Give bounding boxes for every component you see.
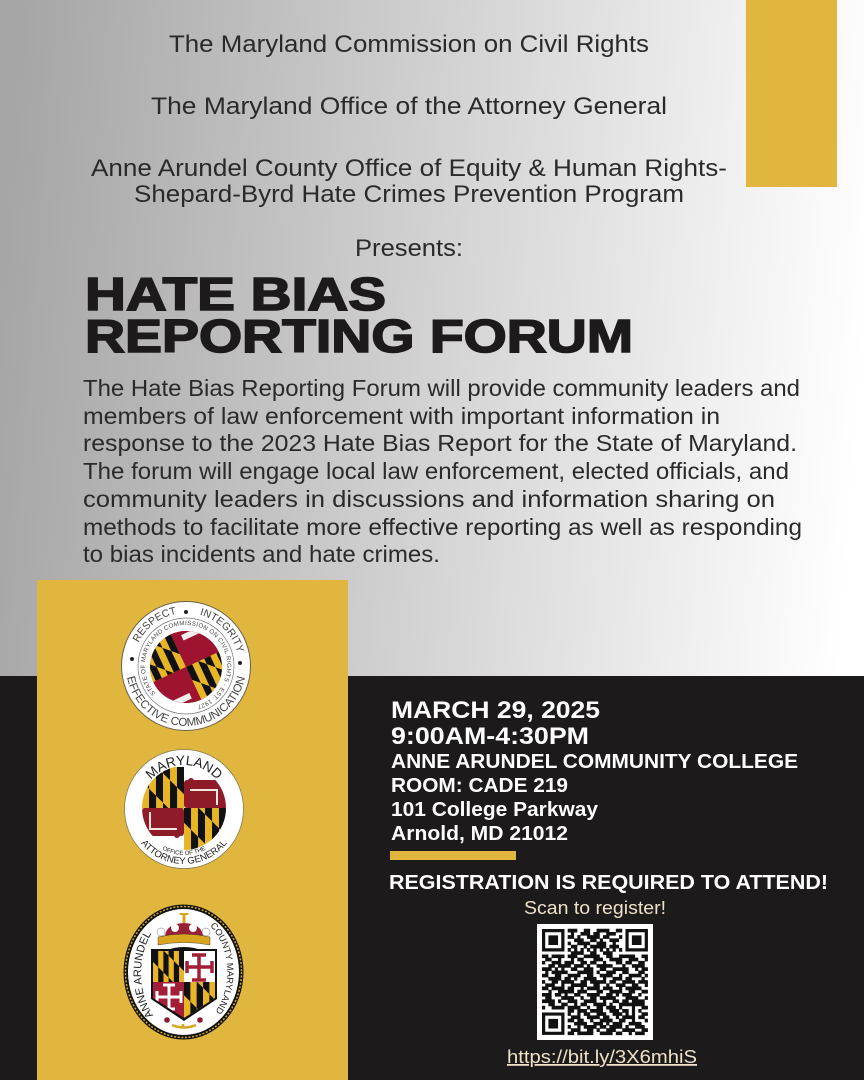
presenting organizations: Anne Arundel County Office of Equity & Human Rights- (91, 155, 727, 182)
title: REPORTING FORUM (85, 310, 633, 362)
description: response to the 2023 Hate Bias Report for the State of Maryland. (83, 430, 797, 456)
presents label: Presents: (355, 235, 463, 262)
registration notice: REGISTRATION IS REQUIRED TO ATTEND! (389, 872, 828, 894)
event details: ROOM: CADE 219 (391, 775, 568, 797)
seal: Anne Arundel County (124, 904, 244, 1040)
presenting organizations: The Maryland Commission on Civil Rights (169, 31, 649, 58)
scan prompt: Scan to register! (524, 898, 666, 918)
presenting organizations: The Maryland Office of the Attorney General (151, 93, 667, 120)
seal: Maryland Commission on Civil Rights: EFFECTIVE COMMUNICATION (127, 676, 245, 726)
seal: Maryland Commission on Civil Rights (121, 601, 251, 731)
registration link: https://bit.ly/3X6mhiS (507, 1047, 697, 1067)
description: community leaders in discussions and information sharing on (83, 486, 775, 512)
description: The forum will engage local law enforcement, elected officials, and (83, 458, 789, 484)
QR code (537, 924, 653, 1040)
seal: Maryland Commission on Civil Rights: INTEGRITY (200, 608, 244, 650)
seal: Office of the Attorney General: ATTORNEY GENERAL (141, 840, 227, 864)
seal: Maryland Commission on Civil Rights: RESPECT (132, 606, 175, 642)
presenting organizations: Shepard-Byrd Hate Crimes Prevention Program (134, 181, 684, 208)
background gradient (0, 0, 864, 680)
event details: 9:00AM-4:30PM (391, 723, 589, 750)
gold divider (390, 851, 516, 860)
seal: Anne Arundel County: ANNE ARUNDEL (134, 933, 154, 1017)
gold corner block (746, 0, 837, 187)
event details: 101 College Parkway (391, 799, 599, 821)
seal: Office of the Attorney General: OFFICE OF THE (163, 846, 206, 855)
shield (151, 949, 222, 1028)
event details: MARCH 29, 2025 (391, 697, 600, 724)
description: The Hate Bias Reporting Forum will provide community leaders and (83, 375, 800, 401)
event details: ANNE ARUNDEL COMMUNITY COLLEGE (391, 751, 798, 773)
title (85, 268, 633, 362)
gold seal panel (37, 580, 348, 1080)
event details: Arnold, MD 21012 (391, 823, 568, 845)
crown (157, 913, 210, 951)
seal: Office of the Attorney General (124, 749, 244, 869)
title: HATE BIAS (85, 268, 386, 320)
presenting organizations (91, 31, 727, 208)
description: to bias incidents and hate crimes. (83, 541, 440, 567)
seal: Anne Arundel County: COUNTY MARYLAND (211, 923, 234, 1014)
seal: Maryland Commission on Civil Rights: STATE OF MARYLAND COMMISSION ON CIVIL RIGHTS · EST. 1927 (140, 620, 232, 710)
description: methods to facilitate more effective reporting as well as responding (83, 514, 802, 540)
seal: Office of the Attorney General: MARYLAND (145, 756, 222, 779)
dark lower band (0, 676, 864, 1080)
description: members of law enforcement with important information in (83, 403, 720, 429)
event details (391, 697, 798, 845)
description (83, 375, 802, 567)
